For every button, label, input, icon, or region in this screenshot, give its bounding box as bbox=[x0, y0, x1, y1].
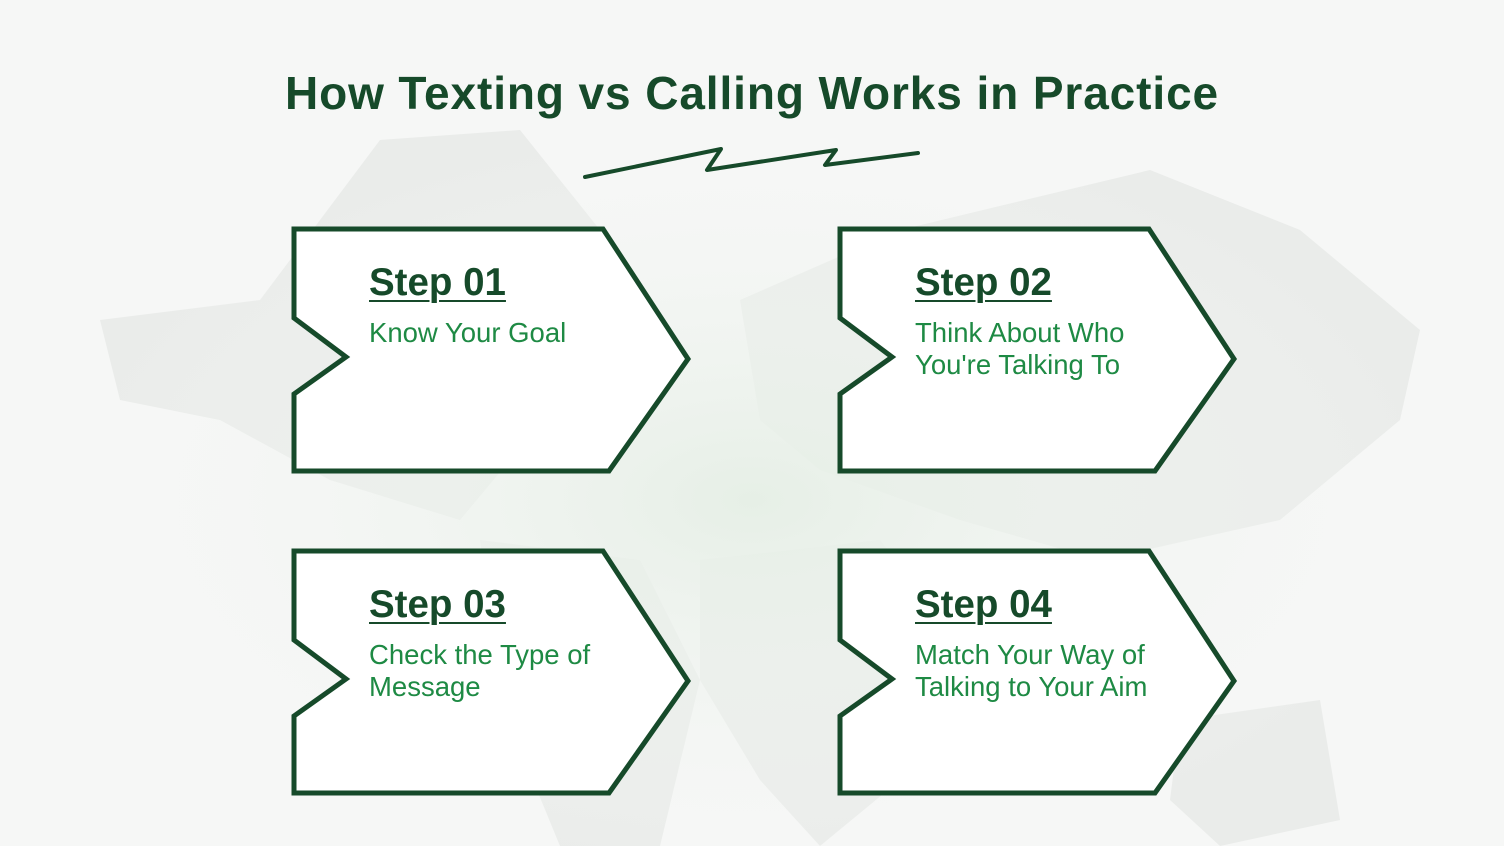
card: step 04: Match Your Way of bbox=[915, 639, 1145, 670]
card: step 01: Step 01 bbox=[369, 261, 506, 304]
card: step 01 bbox=[292, 226, 691, 474]
card: step 04: Talking to Your Aim bbox=[915, 671, 1147, 702]
card: step 02: Step 02 bbox=[915, 261, 1052, 304]
title: How Texting vs Calling Works in Practice bbox=[285, 67, 1219, 119]
card: step 01: Know Your Goal bbox=[369, 317, 566, 348]
card: step 02: Think About Who bbox=[915, 317, 1124, 348]
card: step 03: Message bbox=[369, 671, 481, 702]
card: step 04: Step 04 bbox=[915, 583, 1052, 626]
card: step 02 bbox=[838, 226, 1237, 474]
card: step 03: Check the Type of bbox=[369, 639, 590, 670]
card: step 03: Step 03 bbox=[369, 583, 506, 626]
card: step 03 bbox=[292, 548, 691, 796]
card: step 04 bbox=[838, 548, 1237, 796]
card: step 02: You're Talking To bbox=[915, 349, 1120, 380]
squiggle decoration bbox=[583, 147, 920, 179]
